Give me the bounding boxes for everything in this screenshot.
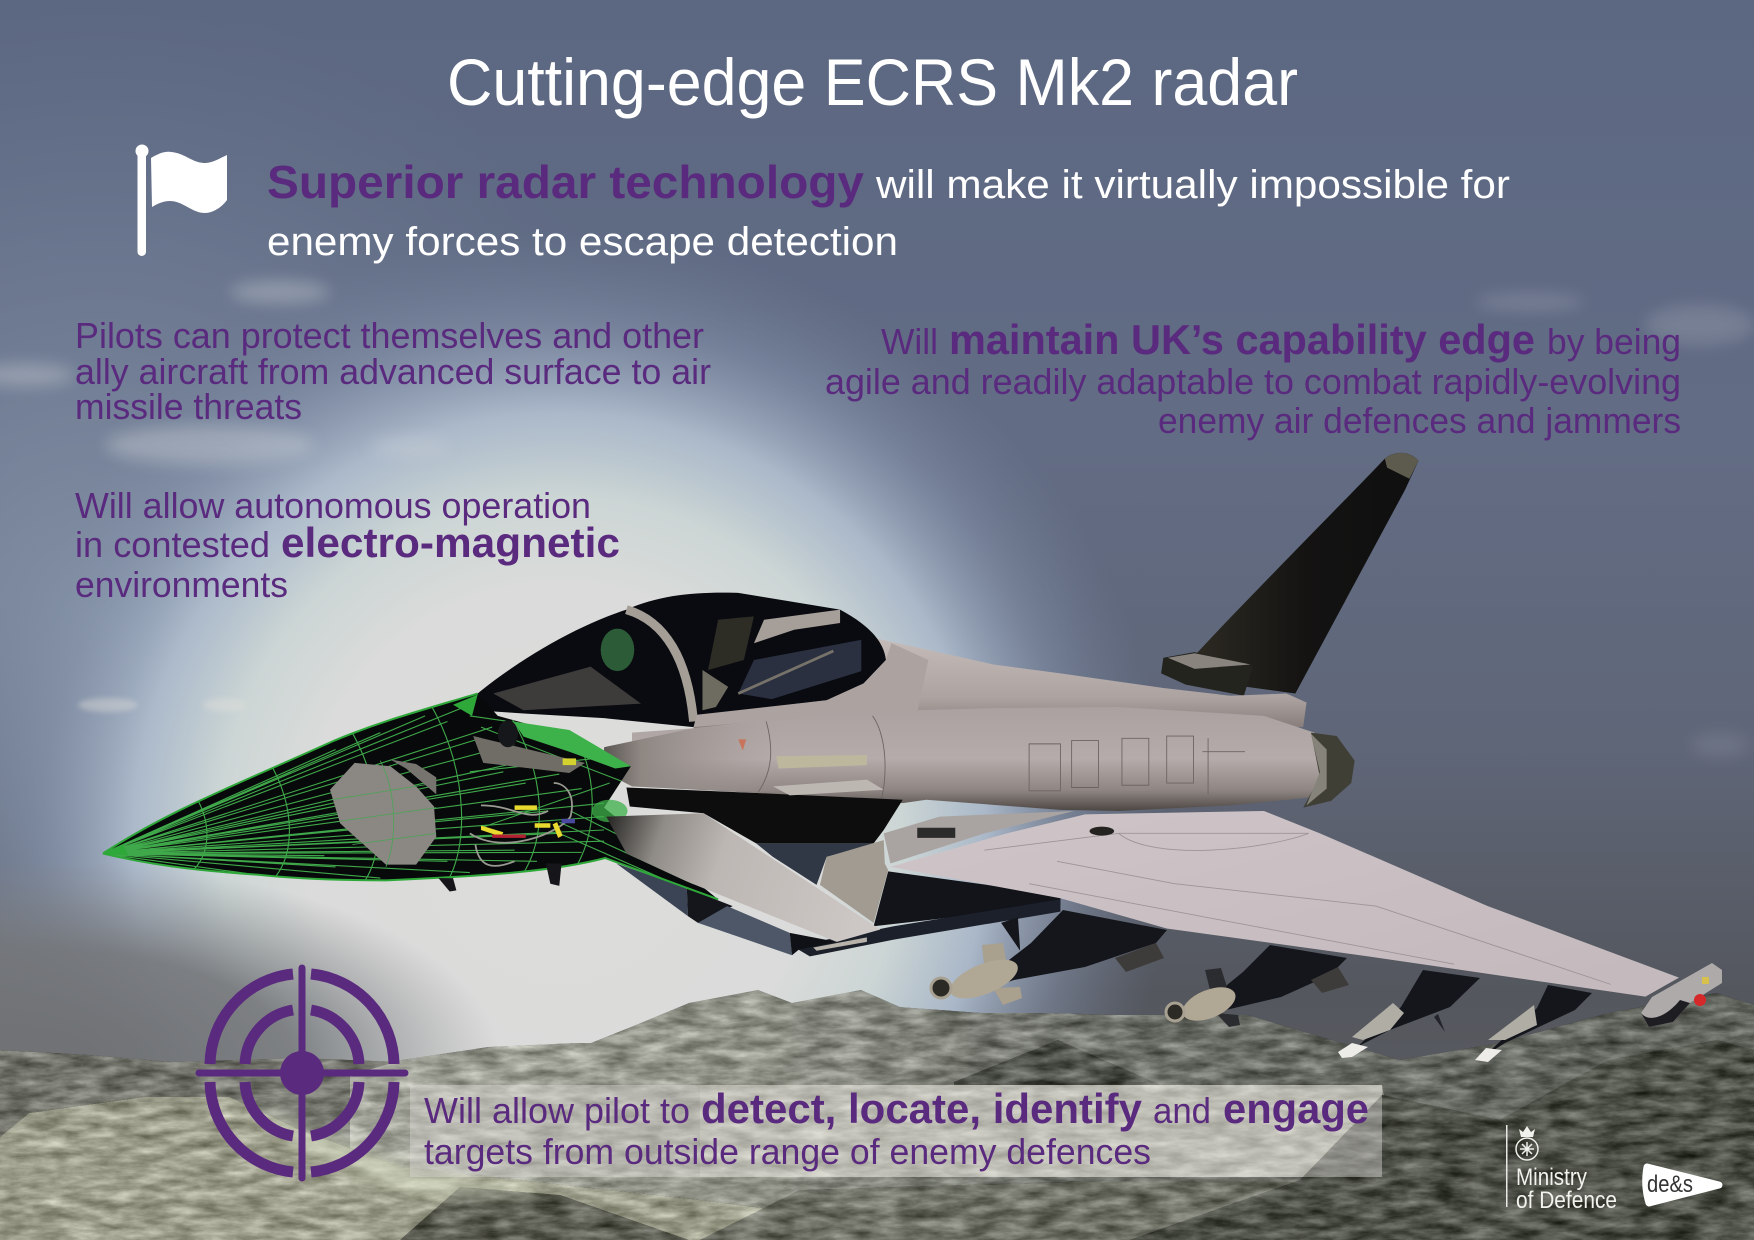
logo: Ministry of Defence: Ministry bbox=[1516, 1164, 1587, 1191]
gun and sensor head bbox=[473, 720, 631, 822]
radar antenna dish bbox=[330, 763, 436, 865]
text block: autonomous operation: Will allow autonomous operation bbox=[75, 485, 591, 526]
store: inner bomb bbox=[931, 910, 1167, 1006]
text block: protect aircraft: Pilots can protect themselves and other bbox=[75, 315, 704, 356]
callout panel: Will allow pilot to bbox=[424, 1090, 690, 1131]
text block: autonomous operation: in contested bbox=[75, 524, 270, 565]
store: outer missile bbox=[1475, 985, 1592, 1062]
dark underwing and long pylon missile bbox=[799, 871, 1060, 956]
text block: protect aircraft: missile threats bbox=[75, 386, 302, 427]
radar wireframe lines bbox=[103, 705, 705, 889]
logo: Ministry of Defence: of Defence bbox=[1516, 1187, 1617, 1214]
text block: autonomous operation: environments bbox=[75, 564, 288, 605]
title: Cutting-edge ECRS Mk2 radar bbox=[447, 45, 1298, 119]
text block: capability edge: by being bbox=[1547, 321, 1681, 362]
text block: autonomous operation bbox=[75, 485, 620, 605]
text block: capability edge: Will bbox=[881, 321, 938, 362]
store: inner missile bbox=[1338, 970, 1480, 1058]
icon: flag bbox=[136, 144, 227, 256]
black underside bbox=[626, 787, 903, 843]
text block: protect aircraft bbox=[75, 315, 711, 427]
sensor fins bbox=[438, 864, 562, 892]
fighter jet with radar cutaway bbox=[103, 453, 1722, 1062]
headline statement: will make it virtually impossible for bbox=[875, 163, 1510, 207]
background: mountains bbox=[0, 990, 1754, 1240]
canopy bbox=[478, 593, 928, 727]
engine nozzle bbox=[1303, 733, 1355, 808]
fuselage details bbox=[738, 739, 884, 795]
text block: capability edge bbox=[825, 316, 1681, 441]
headline statement: enemy forces to escape detection bbox=[267, 220, 898, 264]
underwing stores bbox=[931, 910, 1592, 1062]
radome wireframe bbox=[103, 694, 718, 899]
avionics cutaway bbox=[470, 783, 575, 866]
callout panel: targets from outside range of enemy defences bbox=[424, 1131, 1151, 1172]
main wing bbox=[890, 811, 1679, 997]
callout panel: and bbox=[1153, 1090, 1211, 1131]
main fuselage bbox=[632, 707, 1331, 811]
text block: capability edge: agile and readily adaptable to combat rapidly-evolving bbox=[825, 361, 1681, 402]
headline statement: Superior radar technology bbox=[267, 156, 864, 208]
callout panel: engage bbox=[1223, 1085, 1369, 1132]
text block: protect aircraft: ally aircraft from advanced surface to air bbox=[75, 351, 711, 392]
air intakes bbox=[616, 864, 837, 955]
icon: target crosshair bbox=[199, 968, 405, 1178]
blue under-panel bbox=[756, 843, 877, 885]
callout panel bbox=[410, 1085, 1382, 1177]
logo: Ministry of Defence bbox=[1506, 1125, 1617, 1214]
text block: autonomous operation: electro-magnetic bbox=[281, 519, 620, 566]
canard foreplane bbox=[606, 813, 880, 942]
text block: capability edge: maintain UK’s capability edge bbox=[949, 316, 1535, 363]
crest bbox=[1516, 1126, 1538, 1160]
text block: capability edge: enemy air defences and jammers bbox=[1158, 400, 1681, 441]
upper fuselage spine bbox=[694, 638, 1307, 738]
tail fin bbox=[1161, 453, 1418, 696]
callout panel: detect, locate, identify bbox=[701, 1085, 1142, 1132]
grey lower panel bbox=[820, 811, 1074, 923]
headline statement bbox=[267, 156, 1510, 264]
logo: de&s bbox=[1646, 1167, 1719, 1203]
fuselage panel lines bbox=[758, 716, 1245, 822]
fuselage nose blend bbox=[604, 720, 783, 793]
wingtip pod bbox=[1641, 963, 1722, 1027]
logo: de&s: de&s bbox=[1647, 1171, 1693, 1198]
store: outer bomb bbox=[1166, 945, 1349, 1027]
